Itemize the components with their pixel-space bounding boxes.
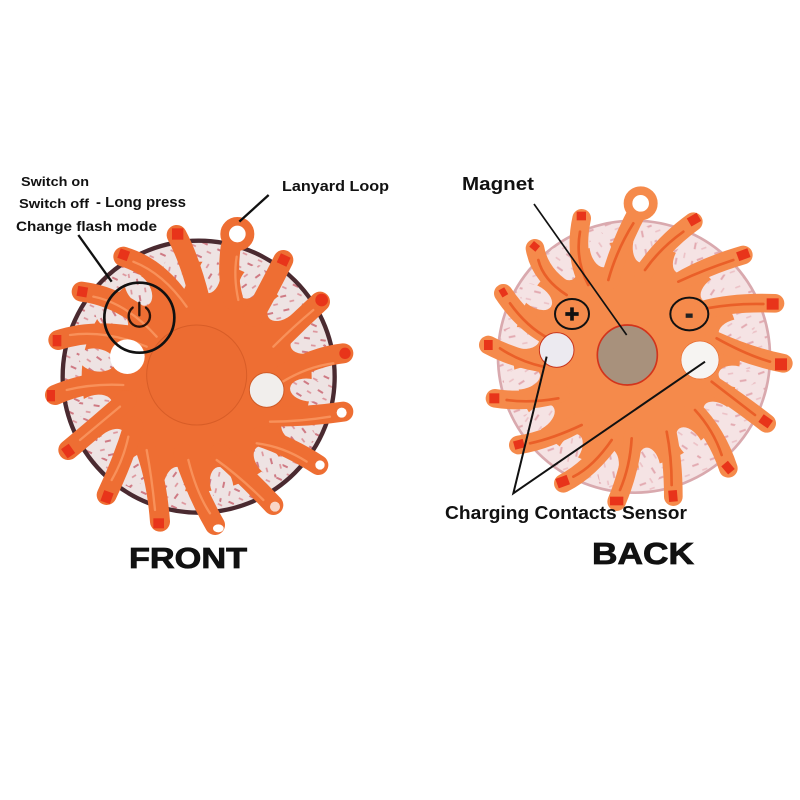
lens housing xyxy=(63,241,335,513)
white contact left xyxy=(110,339,145,374)
panel: back view of beacon xyxy=(484,191,787,505)
spoke ridges xyxy=(67,257,333,513)
spokes xyxy=(488,210,783,502)
central disc xyxy=(513,242,740,468)
spokes xyxy=(55,235,343,525)
lens housing xyxy=(498,221,770,493)
icon: power symbol xyxy=(129,303,150,327)
heading: back: BACK xyxy=(592,536,695,571)
label: magnet: Magnet xyxy=(462,174,534,194)
plus ring xyxy=(555,299,589,329)
white contact right xyxy=(249,373,284,407)
lens windows xyxy=(74,255,329,505)
label: long press: - Long press xyxy=(96,195,186,211)
label: change flash mode: Change flash mode xyxy=(16,219,158,234)
arrow to magnet xyxy=(534,204,627,335)
magnet xyxy=(597,325,657,385)
label: switch off: Switch off xyxy=(19,196,90,211)
callout ring around power button xyxy=(104,283,174,353)
arrows to charging contacts xyxy=(513,357,705,493)
left charging contact xyxy=(539,333,574,367)
arrow to lanyard loop xyxy=(239,195,269,222)
arrow to power button xyxy=(78,235,112,282)
lens windows xyxy=(501,225,757,487)
centre recess ring xyxy=(147,325,247,425)
panel: front view of beacon xyxy=(47,195,351,532)
central disc xyxy=(82,262,312,492)
label: lanyard loop: Lanyard Loop xyxy=(282,178,389,195)
loop and red tips xyxy=(484,191,787,505)
heading: front: FRONT xyxy=(129,543,247,575)
spoke grooves xyxy=(500,223,770,490)
minus ring xyxy=(670,298,708,330)
loop and tip openings xyxy=(47,221,351,532)
label: charging contacts sensor: Charging Contacts Sensor xyxy=(445,503,687,523)
label: switch on: Switch on xyxy=(21,174,89,189)
right charging contact xyxy=(681,341,719,379)
